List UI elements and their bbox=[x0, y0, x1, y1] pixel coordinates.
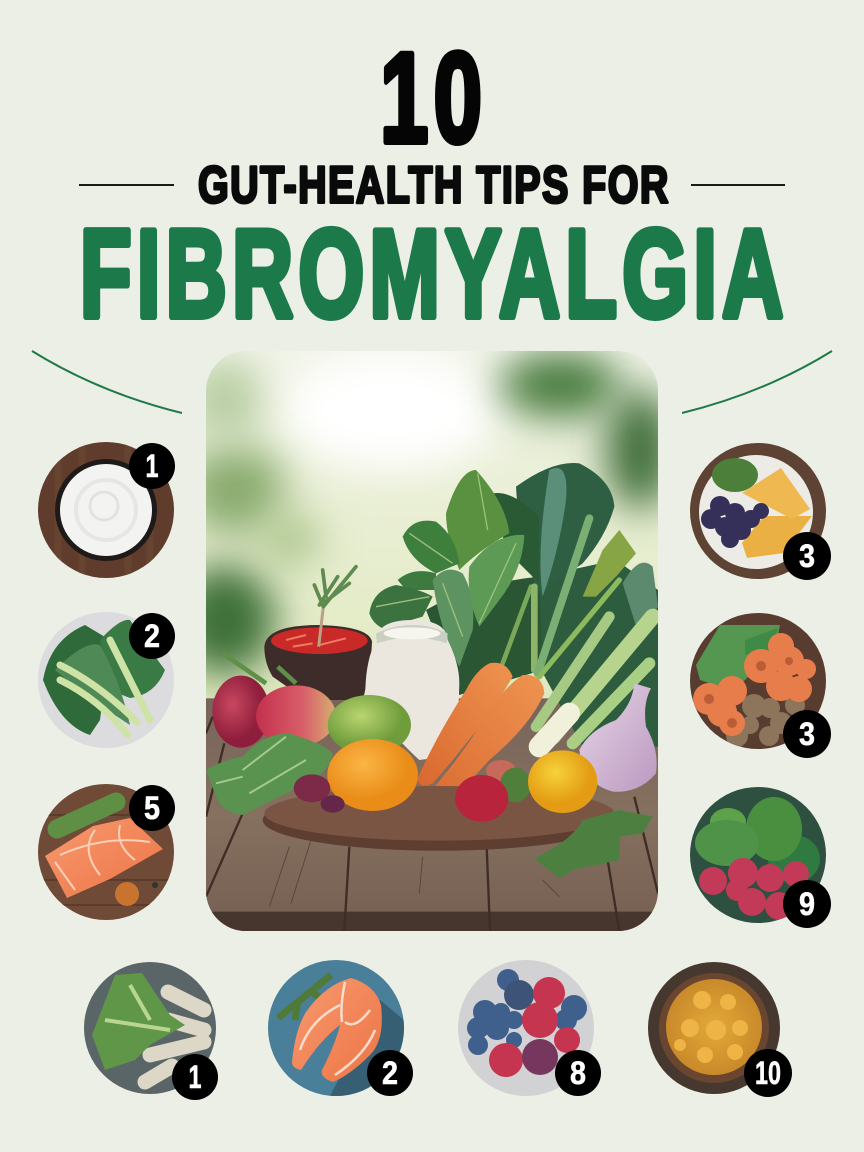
food circle 10: bowl of golden grains bbox=[648, 962, 792, 1097]
badge 8: 8 bbox=[570, 1055, 586, 1091]
heading: gut-health tips for: GUT-HEALTH TIPS FOR bbox=[198, 155, 668, 214]
badge 1: 1 bbox=[188, 1059, 202, 1095]
herb sprig bbox=[534, 810, 653, 878]
badge 10: 10 bbox=[755, 1055, 781, 1091]
badge 9: 9 bbox=[799, 886, 815, 922]
orange bbox=[327, 739, 418, 811]
food circle 6: spinach and raspberries bbox=[690, 787, 831, 928]
badge 8 bbox=[555, 1050, 601, 1096]
badge 3 bbox=[783, 710, 831, 758]
tomatoes and lemon bbox=[455, 750, 597, 822]
carrots bbox=[418, 662, 544, 786]
badge 3 bbox=[783, 532, 831, 580]
badge 2: 2 bbox=[144, 618, 160, 654]
badge 2: 2 bbox=[382, 1055, 398, 1091]
left green arc bbox=[32, 351, 182, 413]
title: number 10: 10 bbox=[380, 27, 482, 170]
badge 3: 3 bbox=[799, 538, 815, 574]
food circle 3: salmon fillet bbox=[38, 784, 175, 920]
badge 2 bbox=[367, 1050, 413, 1096]
central food photo panel bbox=[175, 350, 674, 932]
food circle 4: cheese and grapes bbox=[690, 443, 831, 580]
badge 3: 3 bbox=[799, 716, 815, 752]
food circle 7: lettuce and roots bbox=[84, 962, 218, 1100]
badge 1: 1 bbox=[146, 448, 158, 484]
right green arc bbox=[682, 351, 832, 413]
light leaves bbox=[369, 468, 658, 667]
lettuce and berries bbox=[206, 733, 345, 815]
badge 9 bbox=[783, 880, 831, 928]
milk jar bbox=[365, 620, 459, 760]
wooden plate bbox=[263, 786, 616, 851]
garlic bbox=[579, 683, 657, 792]
scallions and leeks bbox=[503, 518, 653, 747]
wooden table bbox=[206, 698, 658, 932]
back dark foliage bbox=[426, 463, 658, 747]
apples bbox=[212, 653, 411, 755]
food circle 5: shrimp and legumes bbox=[690, 613, 831, 758]
food still life bbox=[206, 463, 658, 932]
food circle 8: salmon steak bbox=[268, 960, 413, 1096]
badge 10 bbox=[744, 1049, 792, 1097]
food circle 9: mixed berries bbox=[458, 960, 601, 1096]
badge 5: 5 bbox=[144, 790, 160, 826]
title: fibromyalgia: FIBROMYALGIA bbox=[80, 205, 783, 343]
food circle 2: bok choy bbox=[38, 612, 175, 748]
food circle 1: yogurt bbox=[38, 442, 175, 578]
sauce bowl bbox=[264, 567, 372, 700]
